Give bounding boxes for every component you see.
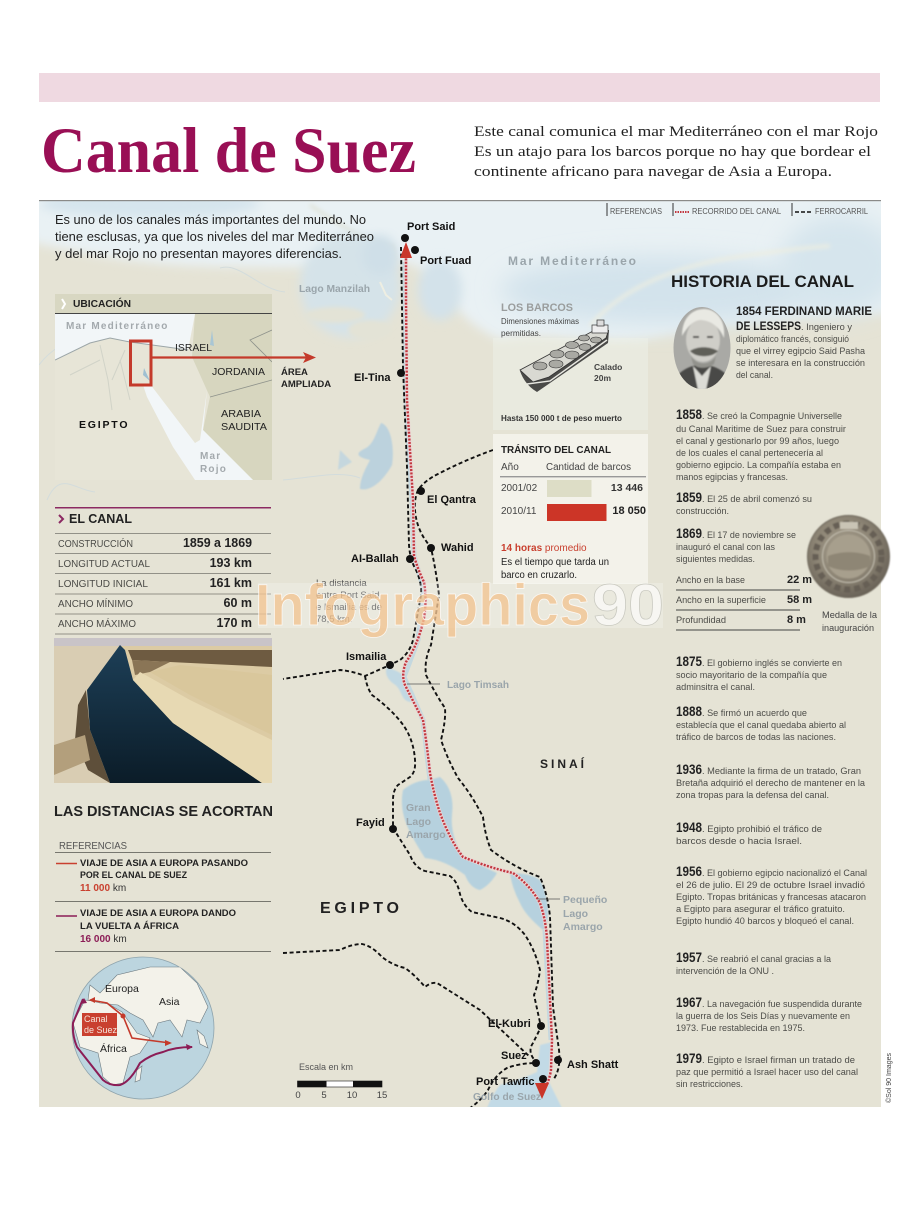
text: 1967: 1973. Fue restablecida en 1975.: [676, 1023, 805, 1034]
label: area ampliada: [281, 367, 331, 390]
globe labels: Europa: [105, 983, 139, 995]
map labels: cities: Fayid: [356, 817, 385, 829]
text: 1859: . El 25 de abril comenzó su: [702, 494, 812, 505]
scale bar: [295, 1062, 387, 1101]
route via canal: [90, 1000, 170, 1043]
text: 1854: del canal.: [736, 370, 773, 381]
map labels: water and regions: Golfo de Suez: [473, 1091, 541, 1103]
recorrido del canal: [400, 242, 552, 1099]
table: medidas: 58 m: [787, 594, 812, 606]
text: 1948: . Egipto prohibió el tráfico de: [702, 824, 822, 835]
inset labels: EGIPTO: [79, 419, 129, 431]
text: 1858: gobierno egipcio. La compañía estaba en: [676, 460, 841, 471]
legend: referencias: RECORRIDO DEL CANAL: [692, 207, 782, 216]
icon: ship: [520, 320, 609, 392]
text: 1967: 1967: [676, 994, 702, 1010]
text: 1888: establecía que el canal quedaba abierto al: [676, 720, 846, 731]
text: 1956: [676, 863, 867, 927]
panel: el canal: 161 km: [210, 576, 252, 590]
map labels: water and regions: SINAÍ: [540, 756, 585, 771]
text: 1869: [676, 525, 796, 565]
map labels: water and regions: Amargo: [563, 921, 603, 933]
bar 2001/02: 13 446: [611, 482, 643, 494]
ferrocarril lines: [283, 247, 559, 1110]
text: 1854: . Ingeniero y: [801, 322, 852, 333]
left intro text: [55, 212, 374, 261]
credit: ©Sol 90 Images: [885, 1052, 893, 1103]
inset header: UBICACIÓN: [73, 297, 131, 310]
legend: referencias: [607, 203, 869, 216]
panel: el canal: CONSTRUCCIÓN: [58, 537, 133, 550]
route legend: africa: [56, 908, 236, 945]
map labels: water and regions: Mar Mediterráneo: [508, 254, 636, 268]
route legend: canal: [56, 858, 248, 894]
panel: el canal: 1859 a 1869: [183, 536, 252, 550]
inset labels: Mar: [200, 451, 221, 462]
bar 2010/11: [501, 504, 646, 521]
lago timsah: [386, 667, 414, 702]
text: 1979: [676, 1050, 858, 1090]
arrow: area ampliada: [151, 352, 316, 363]
text: la distancia: entre Port Said: [316, 590, 379, 601]
text: la distancia: 78,5 km.: [316, 614, 352, 625]
map labels: cities: Ismailia: [346, 651, 387, 663]
text: la distancia: La distancia: [316, 578, 367, 589]
text: 1936: [676, 761, 866, 801]
left intro text: tiene esclusas, ya que los niveles del mar Mediterráneo: [55, 229, 374, 244]
caption: medalla: [822, 610, 878, 634]
text: 1854: se interesara en la construcción: [736, 358, 865, 369]
table: medidas: Ancho en la superficie: [676, 595, 766, 606]
inset labels: JORDANIA: [212, 367, 265, 378]
text: 1948: 1948: [676, 819, 702, 835]
text: 1979: paz que permitió a Israel hacer uso del canal: [676, 1067, 858, 1078]
text: 1858: [676, 406, 847, 483]
text: 1875: . El gobierno inglés se convierte en: [702, 658, 842, 669]
text: 1858: de los cuales el canal pertenecería al: [676, 448, 823, 459]
text: 1875: adminsitra el canal.: [676, 682, 755, 693]
panel: el canal: ANCHO MÍNIMO: [58, 597, 133, 610]
route legend: canal: 11 000 km: [80, 883, 126, 894]
watermark: 90: [592, 573, 664, 638]
text: 1854: que el virrey egipcio Said Pasha: [736, 346, 866, 357]
map labels: water and regions: Lago: [563, 908, 588, 920]
text: 1957: [676, 949, 832, 977]
map labels: cities: Port Fuad: [420, 255, 471, 267]
panel: ubicacion: [55, 294, 272, 480]
panel: el canal: 170 m: [217, 616, 252, 630]
inset map: [55, 314, 272, 480]
inset labels: [66, 321, 267, 475]
panel: el canal: ANCHO MÁXIMO: [58, 617, 136, 630]
scale bar: 15: [377, 1090, 387, 1101]
route legend: africa: 16 000 km: [80, 934, 127, 945]
image: medal: [808, 516, 890, 598]
legend: referencias: FERROCARRIL: [815, 207, 869, 216]
map labels: cities: Port Tawfic: [476, 1076, 534, 1088]
text: 1979: sin restricciones.: [676, 1079, 743, 1090]
portrait: lesseps: [674, 307, 730, 389]
bar 2001/02: [501, 480, 643, 497]
globe map: [72, 957, 214, 1099]
panel: el canal: EL CANAL: [69, 512, 132, 526]
map labels: cities: Ash Shatt: [567, 1059, 619, 1071]
label: area ampliada: AMPLIADA: [281, 379, 331, 390]
pequeno lago amargo: [510, 873, 548, 930]
text: 1854: 1854 FERDINAND MARIE: [736, 304, 872, 318]
panel: las distancias se acortan: [54, 803, 273, 952]
text: 1858: 1858: [676, 406, 702, 422]
text: 1936: Bretaña adquirió el derecho de mantener en la: [676, 778, 866, 789]
header band: [39, 73, 880, 102]
route around africa: [73, 999, 192, 1085]
text: 1854: diplomático francés, consiguió: [736, 334, 849, 345]
scale bar: 0: [295, 1090, 301, 1101]
canal de suez tag: de Suez: [84, 1025, 118, 1035]
text: 1956: a Egipto para asegurar el tráfico gratuito.: [676, 904, 845, 915]
route legend: africa: LA VUELTA A ÁFRICA: [80, 921, 179, 932]
text: 1854: DE LESSEPS: [736, 319, 801, 333]
panel: los barcos: Hasta 150 000 t de peso muerto: [501, 413, 622, 423]
panel: el canal: LONGITUD INICIAL: [58, 579, 148, 590]
text: 1948: barcos desde o hacia Israel.: [676, 836, 802, 847]
bar 2010/11: 2010/11: [501, 506, 537, 517]
text: 1858: el canal y gestionarlo por 99 años, luego: [676, 436, 839, 447]
text: 1967: la guerra de los Seis Días y nuevamente en: [676, 1011, 850, 1022]
top rule: [39, 200, 881, 201]
text: 1859: 1859: [676, 489, 702, 505]
inset labels: Mar Mediterráneo: [66, 321, 169, 332]
map labels: cities: El-Kubri: [488, 1018, 531, 1030]
text: 1888: tráfico de barcos de todas las naciones.: [676, 732, 836, 743]
heading: historia del canal: HISTORIA DEL CANAL: [671, 272, 854, 291]
panel: los barcos: LOS BARCOS: [501, 302, 573, 314]
intro text: continente africano para navegar de Asia a Europa.: [474, 164, 832, 180]
text: 1956: el 26 de julio. El 29 de octubre Israel invadió: [676, 880, 865, 891]
text: 1869: siguientes medidas.: [676, 554, 755, 565]
route legend: canal: VIAJE DE ASIA A EUROPA PASANDO: [80, 858, 248, 869]
lago manzilah: [300, 233, 400, 340]
canal de suez tag: Canal: [84, 1014, 108, 1024]
panel: transito del canal: [493, 434, 648, 584]
map labels: water and regions: Lago Manzilah: [299, 283, 370, 295]
title: Canal de Suez: [41, 115, 416, 187]
table: medidas: Ancho en la base: [676, 575, 745, 586]
map labels: water and regions: Pequeño: [563, 894, 607, 906]
locator box: [130, 341, 151, 385]
label: area ampliada: ÁREA: [281, 367, 308, 378]
text: 1957: 1957: [676, 949, 702, 965]
golfo de suez water: [487, 1042, 562, 1108]
map labels: cities: [346, 221, 619, 1088]
table: medidas: [676, 574, 812, 630]
bar 2010/11: 18 050: [612, 505, 646, 517]
text: 1875: 1875: [676, 653, 702, 669]
text: 1936: zona tropas para la defensa del canal.: [676, 790, 829, 801]
panel: los barcos: Dimensiones máximas: [501, 316, 579, 326]
text: 1956: Egipto hundió 40 barcos y bloqueó el canal.: [676, 916, 854, 927]
intro text: Es un atajo para los barcos porque no hay que bordear el: [474, 144, 871, 160]
watermark: Infographics: [255, 573, 590, 638]
map background: [30, 190, 900, 1110]
legend: referencias: REFERENCIAS: [610, 207, 662, 216]
text: 1875: [676, 653, 842, 693]
text: 1888: . Se firmó un acuerdo que: [702, 708, 807, 719]
map labels: water and regions: [299, 254, 636, 1103]
map labels: water and regions: EGIPTO: [320, 900, 399, 917]
left intro text: y del mar Rojo no presentan mayores diferencias.: [55, 246, 342, 261]
map labels: cities: Port Said: [407, 221, 455, 233]
table: medidas: 22 m: [787, 574, 812, 586]
map labels: water and regions: Amargo: [406, 829, 446, 841]
text: 1957: intervención de la ONU .: [676, 966, 774, 977]
map labels: cities: Suez: [501, 1050, 527, 1062]
table: medidas: Profundidad: [676, 615, 726, 626]
text: 1936: 1936: [676, 761, 702, 777]
inset header: [55, 294, 272, 314]
text: la distancia: [316, 578, 382, 625]
globe labels: África: [100, 1042, 127, 1055]
map labels: water and regions: Lago: [406, 816, 431, 828]
text: 1875: socio mayoritario de la compañía que: [676, 670, 827, 681]
panel: el canal: LONGITUD ACTUAL: [58, 559, 150, 570]
text: 1979: 1979: [676, 1050, 702, 1066]
text: 1869: inauguró el canal con las: [676, 542, 775, 553]
route legend: canal: POR EL CANAL DE SUEZ: [80, 870, 187, 881]
table: medidas: 8 m: [787, 614, 806, 626]
panel: el canal: 193 km: [210, 556, 252, 570]
scale bar: 10: [347, 1090, 357, 1101]
text: 1859: [676, 489, 812, 517]
text: 1888: 1888: [676, 703, 702, 719]
inland lakes near canal: [358, 423, 393, 489]
map labels: water and regions: Lago Timsah: [447, 679, 509, 691]
left intro text: Es uno de los canales más importantes del mundo. No: [55, 212, 366, 227]
scale bar: Escala en km: [299, 1062, 353, 1072]
caption: medalla: inauguración: [822, 623, 874, 634]
panel: los barcos: Calado: [594, 362, 622, 372]
intro text: [474, 124, 878, 180]
panel: transito del canal: 14 horas promedio: [501, 543, 587, 554]
scale bar: 5: [321, 1090, 327, 1101]
text: 1967: [676, 994, 862, 1034]
photo: canal aerial view: [54, 638, 272, 783]
map labels: cities: El Qantra: [427, 494, 477, 506]
text: 1859: construcción.: [676, 506, 729, 517]
intro text: Este canal comunica el mar Mediterráneo con el mar Rojo: [474, 124, 878, 140]
map labels: water and regions: Gran: [406, 802, 431, 814]
text: 1858: du Canal Maritime de Suez para construir: [676, 424, 847, 435]
text: 1854: [736, 304, 872, 381]
map labels: cities: AI-Ballah: [351, 553, 399, 565]
city markers: [386, 234, 562, 1083]
panel: los barcos: 20m: [594, 373, 611, 383]
inset labels: SAUDITA: [221, 422, 267, 433]
inset labels: ISRAEL: [175, 343, 212, 354]
text: 1858: . Se creó la Compagnie Universelle: [702, 411, 842, 422]
text: la distancia: e Ismailia es de: [316, 602, 382, 613]
canal water: [404, 262, 551, 1040]
text: 1967: . La navegación fue suspendida durante: [702, 999, 862, 1010]
panel: las distancias se acortan: REFERENCIAS: [59, 841, 127, 852]
panel: el canal: [55, 507, 271, 634]
panel: los barcos: [493, 302, 648, 430]
panel: los barcos: permitidas.: [501, 328, 541, 338]
panel: el canal: 60 m: [224, 596, 252, 610]
text: 1979: . Egipto e Israel firman un tratado de: [702, 1055, 855, 1066]
bar 2001/02: 2001/02: [501, 483, 538, 494]
text: 1869: . El 17 de noviembre se: [702, 530, 796, 541]
text: 1956: . El gobierno egipcio nacionalizó el Canal: [702, 868, 867, 879]
text: 1858: manos egipcias y francesas.: [676, 472, 788, 483]
text: 1956: Egipto. Tropas británicas y francesas atacaron: [676, 892, 866, 903]
mediterranean sea: [30, 190, 900, 340]
text: 1936: . Mediante la firma de un tratado, Gran: [702, 766, 861, 777]
text: 1888: [676, 703, 846, 743]
caption: medalla: Medalla de la: [822, 610, 878, 621]
inset labels: ARABIA: [221, 409, 261, 420]
route legend: africa: VIAJE DE ASIA A EUROPA DANDO: [80, 908, 236, 919]
gran lago amargo: [402, 777, 497, 890]
panel: transito del canal: Año: [501, 462, 519, 473]
map labels: cities: El-Tina: [354, 372, 391, 384]
text: 1957: . Se reabrió el canal gracias a la: [702, 954, 832, 965]
text: 1869: 1869: [676, 525, 702, 541]
text: 1956: 1956: [676, 863, 702, 879]
globe labels: [100, 983, 180, 1055]
panel: transito del canal: barco en cruzarlo.: [501, 570, 577, 581]
panel: transito del canal: Cantidad de barcos: [546, 462, 631, 473]
inset labels: Rojo: [200, 464, 227, 475]
panel: transito del canal: Es el tiempo que tarda un: [501, 557, 609, 568]
panel: las distancias se acortan: LAS DISTANCIAS SE ACORTAN: [54, 803, 273, 820]
text: 1948: [676, 819, 822, 847]
panel: transito del canal: TRÁNSITO DEL CANAL: [501, 443, 612, 456]
map labels: cities: Wahid: [441, 542, 474, 554]
canal de suez tag: [82, 1013, 118, 1036]
globe labels: Asia: [159, 996, 180, 1008]
